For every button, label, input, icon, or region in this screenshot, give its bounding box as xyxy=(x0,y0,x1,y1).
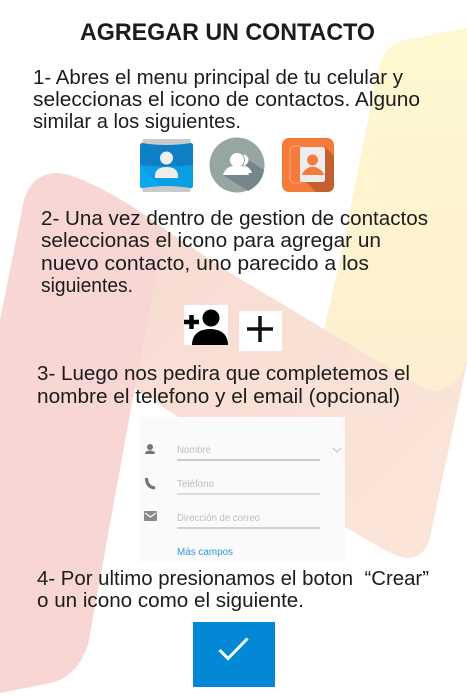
step 2 text xyxy=(41,208,428,297)
step 2 text: siguientes. xyxy=(41,275,133,297)
background shape: pink xyxy=(0,173,165,693)
phone field: Teléfono xyxy=(177,479,214,490)
background shape: peach overlap xyxy=(128,226,467,558)
step 1 text xyxy=(33,67,420,133)
title: AGREGAR UN CONTACTO xyxy=(80,19,375,46)
icon: grey contacts circle xyxy=(210,138,264,192)
step 4 text: 4- Por ultimo presionamos el boton “Crear” xyxy=(37,568,429,590)
icon: form mail xyxy=(144,511,157,521)
step 3 text xyxy=(37,363,410,408)
icon: blue contacts xyxy=(140,139,193,192)
step 2 text: nuevo contacto, uno parecido a los xyxy=(41,253,369,275)
more fields link: Más campos xyxy=(177,547,233,558)
email field: Dirección de correo xyxy=(177,513,260,524)
icon: add person xyxy=(184,305,228,345)
name field: Nombre xyxy=(177,445,211,456)
step 2 text: 2- Una vez dentro de gestion de contactos xyxy=(41,208,428,230)
icon: confirm check button xyxy=(193,622,275,687)
step 3 text: nombre el telefono y el email (opcional) xyxy=(37,386,400,408)
form screenshot xyxy=(140,417,345,562)
icon: plus xyxy=(239,311,282,351)
icon: orange address book xyxy=(282,138,334,192)
icon: form person xyxy=(145,444,155,454)
step 2 text: seleccionas el icono para agregar un xyxy=(41,230,381,252)
step 3 text: 3- Luego nos pedira que completemos el xyxy=(37,363,410,385)
background shape: yellow xyxy=(324,28,467,390)
chevron xyxy=(333,448,341,452)
step 4 text: o un icono como el siguiente. xyxy=(37,590,304,612)
step 1 text: seleccionas el icono de contactos. Alguno xyxy=(33,89,420,111)
step 1 text: 1- Abres el menu principal de tu celular y xyxy=(33,67,403,89)
step 1 text: similar a los siguientes. xyxy=(33,111,241,133)
icon: form phone xyxy=(146,478,155,488)
step 4 text xyxy=(37,568,429,612)
